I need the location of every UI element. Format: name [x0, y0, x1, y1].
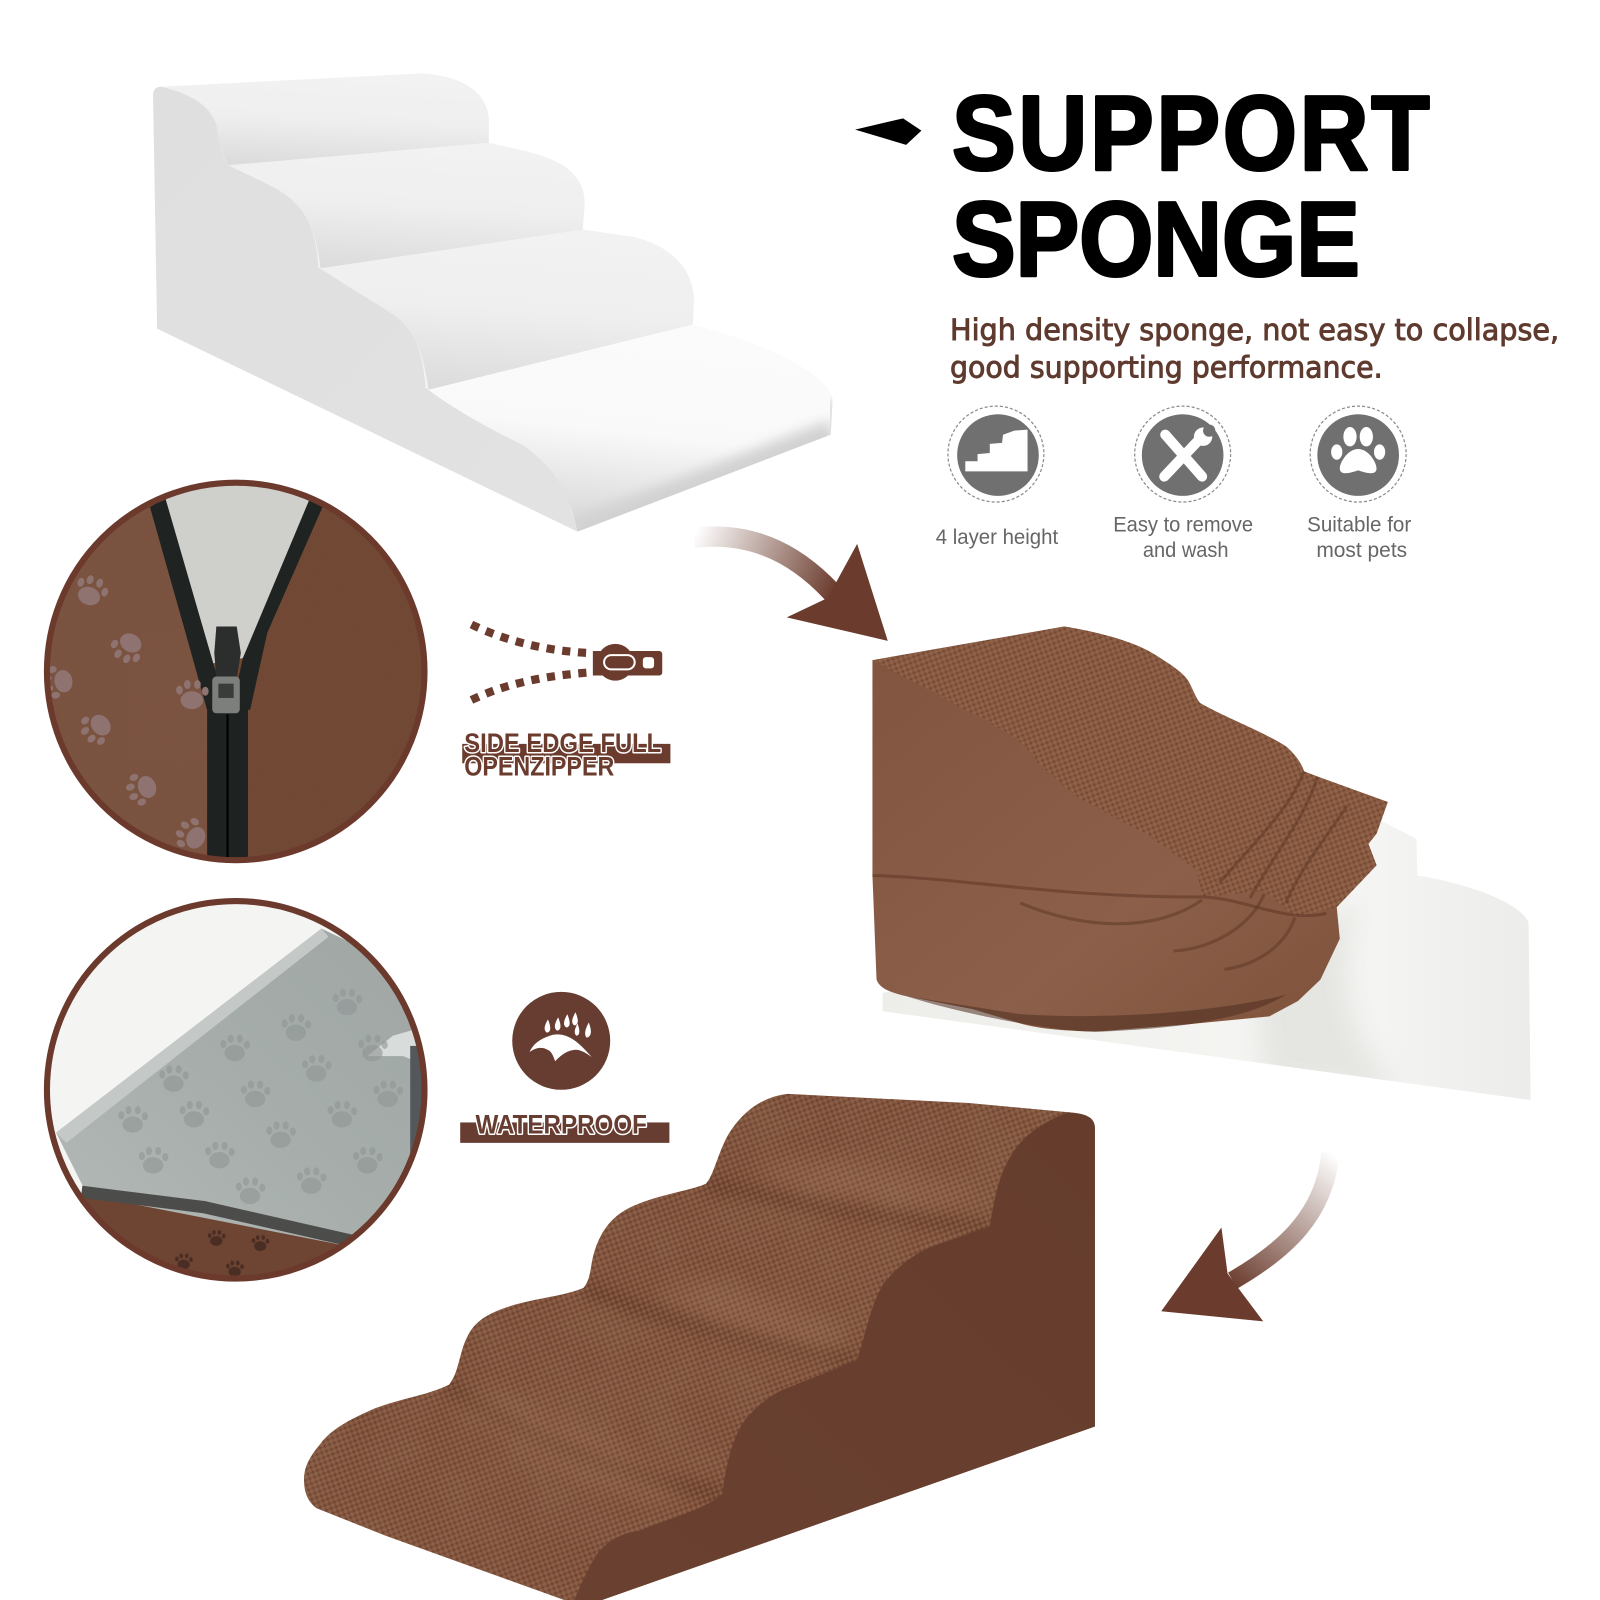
arrow: foam to cover: [694, 537, 888, 641]
icon captions: Easy to remove: [1113, 514, 1253, 537]
icon: zipper: [471, 624, 662, 700]
white foam four-step stairs: [153, 73, 835, 536]
arrow: cover to finished stairs: [1161, 1153, 1331, 1321]
icon: easy to remove tools: [1135, 406, 1231, 502]
icon: waterproof: [512, 992, 610, 1090]
heading: support sponge: SUPPORT: [952, 75, 1430, 193]
waterproof detail photo: [41, 898, 429, 1288]
heading: support sponge: [952, 75, 1430, 299]
icon captions: Suitable for: [1307, 514, 1411, 537]
description text: High density sponge, not easy to collapse,: [950, 313, 1559, 347]
zipper photo ring: [47, 483, 424, 860]
icon: 4 layer height: [948, 406, 1044, 502]
label: side edge full open zipper: [462, 728, 670, 782]
label: side edge full open zipper: SIDE EDGE FULL: [464, 728, 661, 758]
label: waterproof: WATERPROOF: [476, 1110, 647, 1140]
pointer arrow beside heading: [855, 118, 921, 145]
finished brown four-step stairs: [296, 1082, 1112, 1600]
zipper detail photo: [41, 480, 434, 867]
icon captions: and wash: [1143, 539, 1229, 562]
waterproof photo ring: [47, 901, 424, 1279]
label: side edge full open zipper: OPENZIPPER: [464, 752, 614, 782]
icon captions: [936, 514, 1411, 562]
stairs with cover half on: [872, 627, 1531, 1100]
icon captions: 4 layer height: [936, 526, 1058, 549]
icon captions: most pets: [1316, 539, 1407, 562]
heading: support sponge: SPONGE: [952, 181, 1360, 299]
icon: paw: [1310, 406, 1406, 502]
description text: [950, 313, 1559, 385]
description text: good supporting performance.: [950, 351, 1383, 385]
